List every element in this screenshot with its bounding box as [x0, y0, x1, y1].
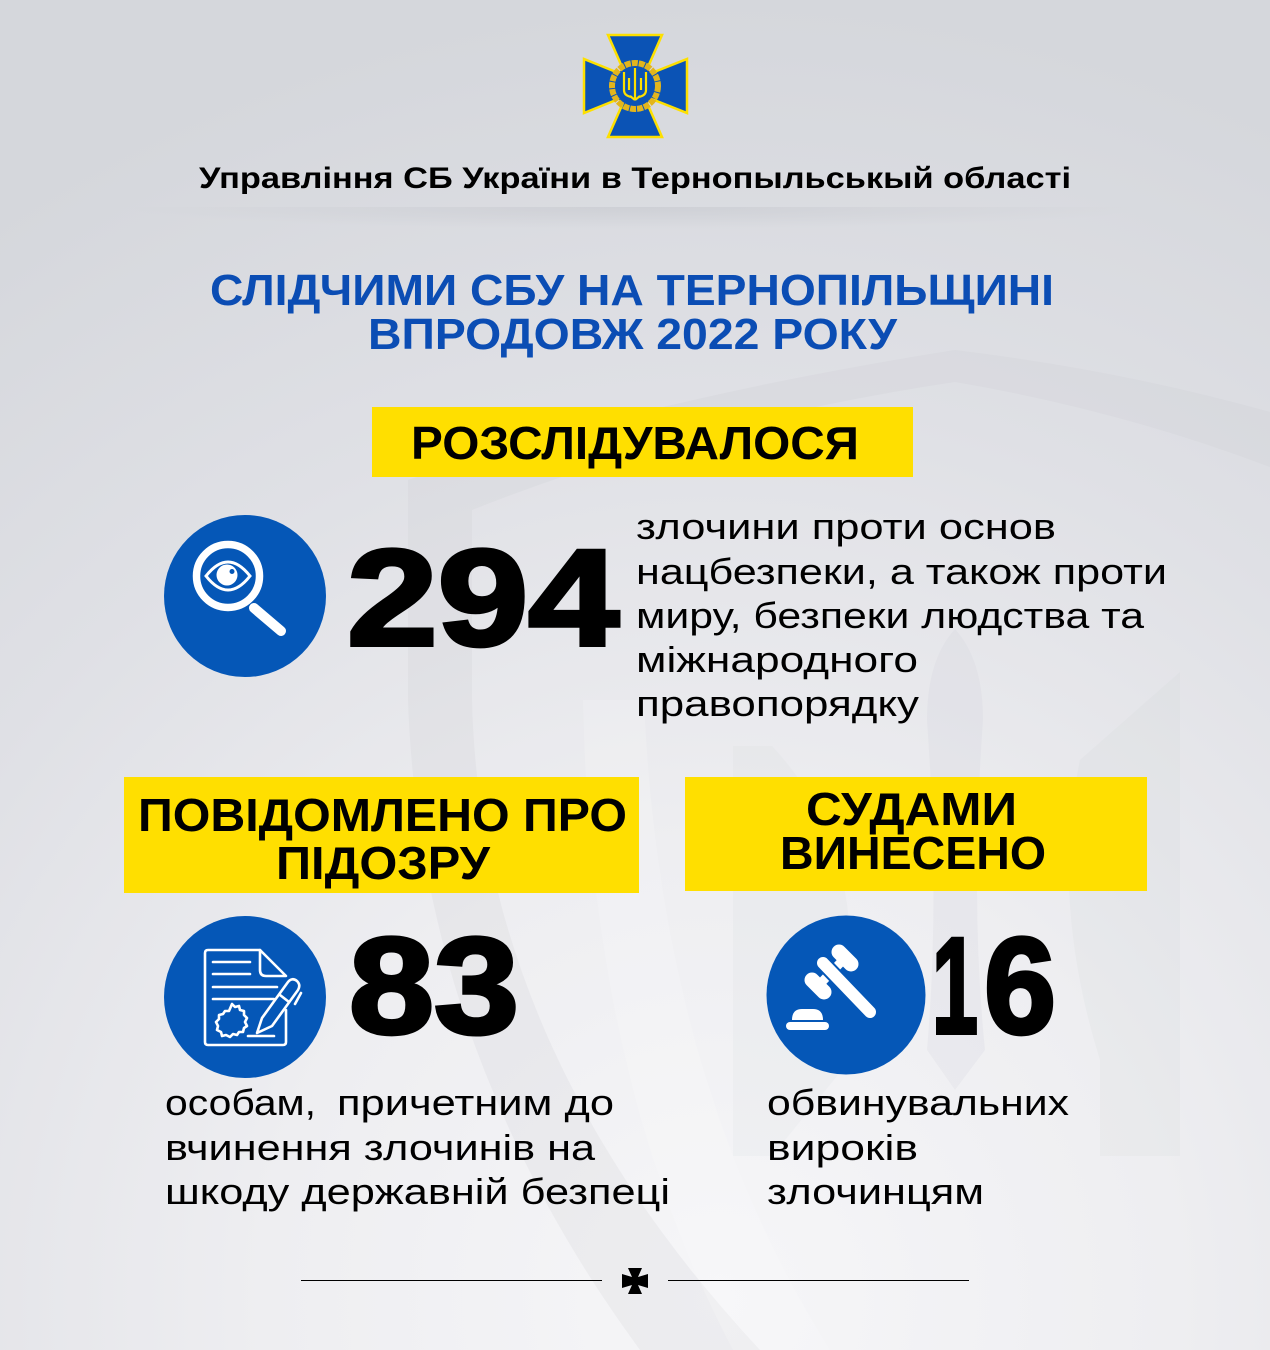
text: 16 description: обвинувальних	[767, 1082, 1069, 1123]
banner: notified of suspicion: ПІДОЗРУ	[276, 837, 491, 889]
number: 16	[932, 910, 1056, 1063]
banner: investigated	[372, 407, 913, 477]
icon: document with pen	[164, 916, 326, 1078]
header shadow	[481, 207, 806, 214]
banner: courts issued: ВИНЕСЕНО	[780, 827, 1046, 879]
number: 83: 83	[349, 910, 519, 1063]
text: 83 description: причетним до	[337, 1082, 614, 1123]
text: 16 description: вироків	[767, 1127, 918, 1168]
banner: notified of suspicion	[124, 777, 639, 893]
banner: courts issued	[685, 777, 1147, 891]
icon: gavel	[766, 916, 926, 1074]
text: 83 description: шкоду державній безпеці	[165, 1171, 670, 1212]
text: 16 description: злочинцям	[767, 1171, 984, 1212]
text: 83 description	[165, 1082, 670, 1212]
footer divider with cross	[301, 1268, 969, 1294]
text: 294 description: нацбезпеки, а також проти	[636, 551, 1167, 592]
number: 294: 294	[347, 522, 619, 675]
text: 83 description: вчинення злочинів на	[165, 1127, 596, 1168]
text: 294 description	[636, 506, 1167, 724]
title: ВПРОДОВЖ 2022 РОКУ	[368, 310, 898, 359]
title: СЛІДЧИМИ СБУ НА ТЕРНОПІЛЬЩИНІ	[210, 266, 1054, 315]
header: agency name: Управління СБ України в Тернопыльськый області	[199, 162, 1071, 195]
banner: investigated: РОЗСЛІДУВАЛОСЯ	[411, 417, 859, 469]
icon: magnifier with eye	[164, 515, 326, 677]
text: 294 description: міжнародного	[636, 639, 918, 680]
text: 83 description: особам,	[165, 1082, 316, 1123]
text: 294 description: миру, безпеки людства та	[636, 595, 1145, 636]
emblem: SBU cross	[584, 35, 687, 137]
number: 16: 1	[932, 910, 978, 1063]
banner: courts issued: СУДАМИ	[806, 783, 1017, 835]
title	[210, 266, 1054, 359]
number: 16: 6	[984, 910, 1056, 1063]
watermark: shield and trident	[408, 350, 1270, 1350]
text: 294 description: правопорядку	[636, 683, 919, 724]
text: 294 description: злочини проти основ	[636, 506, 1056, 547]
text: 16 description	[767, 1082, 1069, 1212]
banner: notified of suspicion: ПОВІДОМЛЕНО ПРО	[138, 789, 627, 841]
